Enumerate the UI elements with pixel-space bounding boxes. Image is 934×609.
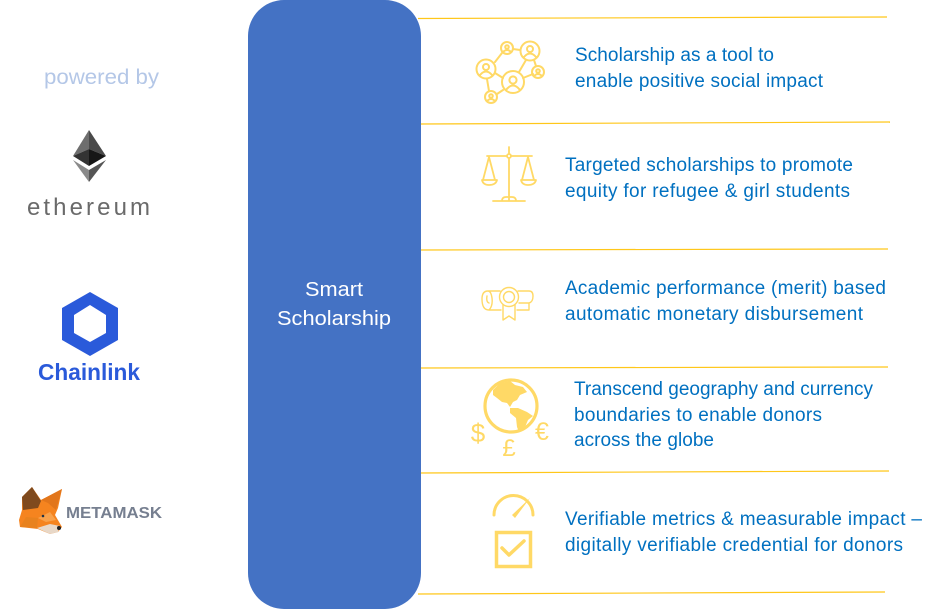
logo: chainlink: Chainlink — [38, 359, 140, 385]
logo: metamask — [19, 487, 162, 534]
logo: ethereum: ethereum — [27, 194, 150, 221]
text: merit: automatic monetary disbursement — [565, 304, 864, 325]
icon: social network — [476, 42, 544, 103]
logo: chainlink — [38, 292, 140, 385]
icon: diploma — [482, 288, 533, 320]
pill label: Scholarship — [277, 308, 391, 330]
text: social impact: Scholarship as a tool to — [575, 45, 774, 66]
icon: balance scales — [482, 147, 536, 201]
icon: globe and currencies: £ — [502, 435, 516, 462]
text: social impact: enable positive social impact — [575, 71, 824, 92]
heading: powered by: powered by — [44, 66, 160, 89]
text: geography: across the globe — [574, 430, 714, 451]
panel: central Smart Scholarship pill — [248, 0, 421, 609]
text: equity: Targeted scholarships to promote — [565, 155, 853, 176]
divider lines — [418, 17, 890, 594]
text: metrics: digitally verifiable credential for donors — [565, 535, 903, 556]
pill label: Smart — [305, 279, 363, 301]
logo: ethereum — [27, 130, 150, 221]
icon: gauge and checkbox — [494, 496, 533, 566]
icon: globe and currencies — [471, 380, 549, 462]
icon: globe and currencies: € — [535, 418, 549, 446]
text: geography: Transcend geography and currency — [574, 379, 874, 400]
text: equity: equity for refugee & girl students — [565, 181, 850, 202]
text: metrics: Verifiable metrics & measurable impact – — [565, 509, 922, 530]
text: merit: Academic performance (merit) based — [565, 278, 886, 299]
logo: metamask: METAMASK — [66, 505, 162, 522]
text: geography: boundaries to enable donors — [574, 405, 822, 426]
icon: globe and currencies: $ — [471, 418, 486, 448]
